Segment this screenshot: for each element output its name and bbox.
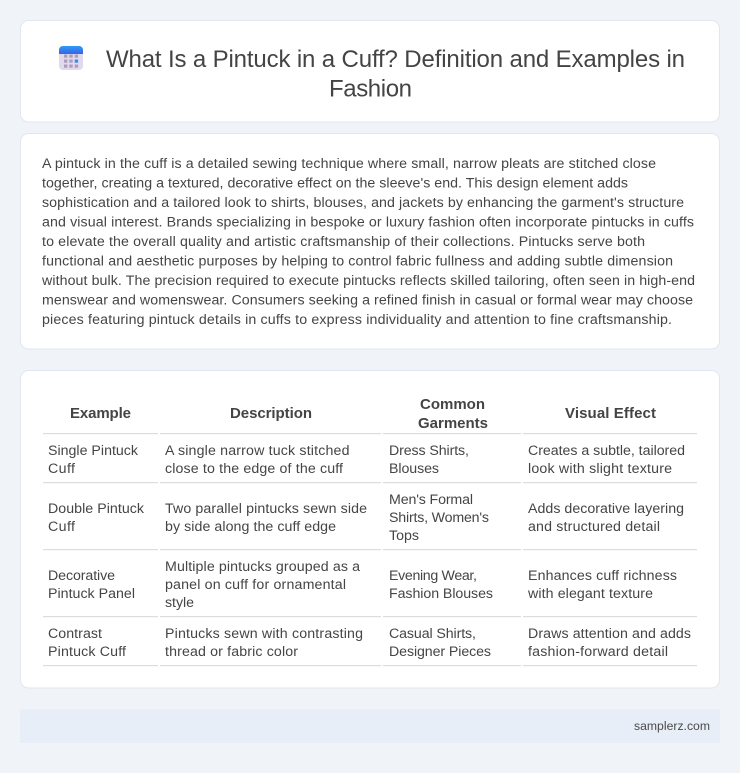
text block: pintuck explanation: pieces featuring pintuck details in cuffs to express individuality and attention to fine craftsmanship.: [42, 312, 672, 328]
footer bar: samplerz.com: [634, 719, 710, 733]
table row: double pintuck cuff: and structured detail: [528, 519, 660, 535]
footer bar: [20, 710, 720, 743]
table header row: Description: [230, 405, 312, 422]
table row: single pintuck cuff: look with slight texture: [528, 461, 672, 477]
table row: contrast pintuck cuff: fashion-forward detail: [528, 644, 668, 660]
table row: double pintuck cuff: Adds decorative layering: [528, 501, 684, 517]
title: Fashion: [329, 76, 412, 102]
table row: double pintuck cuff: Men's Formal: [389, 492, 473, 508]
panel: description paragraph: [20, 134, 720, 349]
table row: decorative pintuck panel: Evening Wear,: [389, 568, 477, 584]
table row: contrast pintuck cuff: Pintucks sewn with contrasting: [165, 626, 363, 642]
text block: pintuck explanation: and visual interest. Brands specializing in bespoke or luxury fashion often incorporate pintucks in cuffs: [42, 215, 694, 231]
table header row: Garments: [418, 415, 488, 432]
table row: contrast pintuck cuff: Draws attention and adds: [528, 626, 691, 642]
table row: contrast pintuck cuff: Designer Pieces: [389, 644, 491, 660]
table row: decorative pintuck panel: Fashion Blouses: [389, 586, 493, 602]
table header row: Visual Effect: [565, 405, 656, 422]
panel: title header: [20, 20, 720, 122]
table row: contrast pintuck cuff: Contrast: [48, 626, 102, 642]
icon: calendar: [59, 46, 83, 70]
table row: decorative pintuck panel: [48, 559, 677, 611]
table row: double pintuck cuff: Tops: [389, 528, 419, 544]
table header row: Common: [420, 396, 485, 413]
table row: decorative pintuck panel: Decorative: [48, 568, 115, 584]
text block: pintuck explanation: sophistication and a tailored look to shirts, blouses, and jackets by enhancing the garment's structure: [42, 195, 684, 211]
table row: single pintuck cuff: Cuff: [48, 461, 75, 477]
table row: single pintuck cuff: Blouses: [389, 461, 439, 477]
text block: pintuck explanation: without bulk. The precision required to execute pintucks reflects skilled tailoring, often seen in high-end: [41, 273, 695, 289]
panel: examples table: [20, 370, 720, 688]
text block: pintuck explanation: [41, 156, 695, 328]
text block: pintuck explanation: together, creating a textured, decorative effect on the sleeve's end. This design element adds: [42, 176, 628, 192]
table row: double pintuck cuff: [48, 492, 684, 544]
table row: single pintuck cuff: A single narrow tuck stitched: [165, 443, 350, 459]
table row: contrast pintuck cuff: Casual Shirts,: [389, 626, 476, 642]
table row: single pintuck cuff: Creates a subtle, tailored: [528, 443, 685, 459]
title: [106, 46, 685, 102]
table row: decorative pintuck panel: Pintuck Panel: [48, 586, 135, 602]
text block: pintuck explanation: A pintuck in the cuff is a detailed sewing technique where small, narrow pleats are stitched close: [42, 156, 656, 172]
table row: double pintuck cuff: Cuff: [48, 519, 75, 535]
table row: single pintuck cuff: [48, 443, 685, 477]
table row: contrast pintuck cuff: thread or fabric color: [165, 644, 298, 660]
table row: decorative pintuck panel: with elegant texture: [527, 586, 653, 602]
table row: decorative pintuck panel: Multiple pintucks grouped as a: [165, 559, 360, 575]
table row: contrast pintuck cuff: [48, 626, 691, 660]
table header row: Example: [70, 405, 131, 422]
table row: double pintuck cuff: by side along the cuff edge: [165, 519, 336, 535]
table row: contrast pintuck cuff: Pintuck Cuff: [48, 644, 126, 660]
table row: double pintuck cuff: Shirts, Women's: [389, 510, 489, 526]
table row: single pintuck cuff: Single Pintuck: [48, 443, 139, 459]
table row: decorative pintuck panel: panel on cuff for ornamental: [165, 577, 346, 593]
text block: pintuck explanation: menswear and womenswear. Consumers seeking a refined finish in casual or formal wear may choose: [42, 292, 693, 308]
table row: decorative pintuck panel: style: [165, 595, 194, 611]
text block: pintuck explanation: functional and aesthetic purposes by helping to control fabric fullness and adding subtle dimension: [42, 254, 673, 270]
title: What Is a Pintuck in a Cuff? Definition and Examples in: [106, 46, 685, 73]
table row: single pintuck cuff: Dress Shirts,: [389, 443, 469, 459]
table row: decorative pintuck panel: Enhances cuff richness: [528, 568, 677, 584]
table row: double pintuck cuff: Double Pintuck: [48, 501, 145, 517]
text block: pintuck explanation: to elevate the overall quality and artistic craftsmanship of their collections. Pintucks serve both: [42, 234, 645, 250]
table row: single pintuck cuff: close to the edge of the cuff: [165, 461, 343, 477]
table header row: [70, 396, 656, 432]
table row: double pintuck cuff: Two parallel pintucks sewn side: [165, 501, 367, 517]
